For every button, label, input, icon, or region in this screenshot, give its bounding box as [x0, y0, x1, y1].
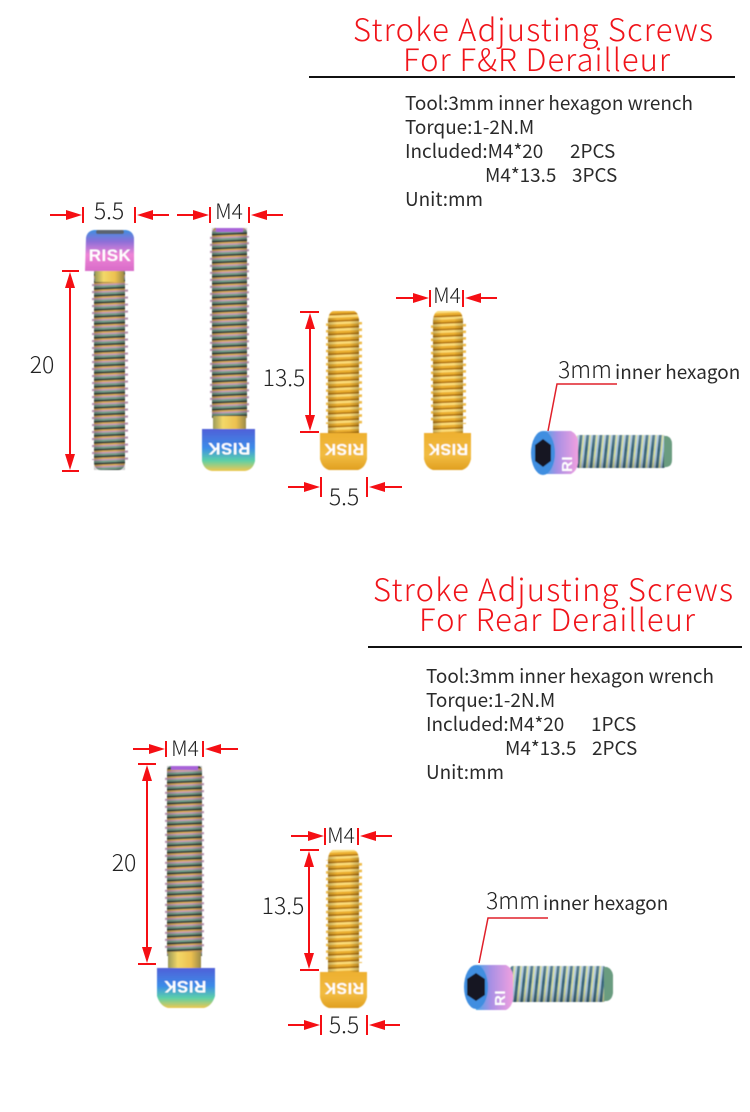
dimension: 5.5 gold head: [288, 477, 402, 512]
dimension: 20 length: 20: [30, 346, 54, 380]
callout: 3mm inner hexagon section 2: [479, 882, 668, 963]
specs text: section 2: M4*13.5: [505, 734, 576, 761]
screw: rainbow M4x20 section 2: [157, 766, 215, 1008]
specs text: section 1: 3PCS: [572, 161, 617, 188]
dimension: 13.5 length: [263, 312, 319, 432]
callout: 3mm inner hexagon section 2: inner hexagon: [543, 889, 668, 916]
title: section 2: Stroke Adjusting Screws: [373, 565, 733, 610]
callout: 3mm inner hexagon: inner hexagon: [615, 358, 740, 385]
screw: rainbow M4x20 head up: [85, 230, 134, 470]
dimension: 20 section 2: 20: [112, 844, 136, 878]
dimension: 5.5 gold head: 5.5: [329, 478, 359, 512]
dimension: M4 gold: M4: [433, 280, 461, 310]
dimension: 5.5 head width: 5.5: [94, 192, 124, 226]
screw: gold M4x13.5: RISK: [324, 440, 364, 457]
specs text: section 1: Included:M4*20: [405, 137, 543, 164]
dimension: M4 section 2: [133, 733, 238, 763]
dimension: M4 thread: [177, 196, 283, 226]
dimension: M4 gold: [396, 280, 497, 310]
dimension: 20 length: [30, 271, 79, 471]
specs text: section 1: Tool:3mm inner hexagon wrench: [405, 89, 693, 116]
dimension: 5.5 head width: [50, 192, 169, 226]
title: section 2: [368, 565, 742, 648]
screw: gold M4x13.5 second: [424, 311, 471, 470]
specs text: section 1: Unit:mm: [405, 185, 483, 212]
specs text: section 1: [405, 89, 693, 212]
specs text: section 2: [426, 662, 714, 785]
specs text: section 2: 1PCS: [591, 710, 636, 737]
specs text: section 2: Tool:3mm inner hexagon wrench: [426, 662, 714, 689]
dimension: 20 section 2: [112, 764, 156, 964]
title: section 1: For F&R Derailleur: [403, 35, 671, 80]
dimension: 13.5 length: 13.5: [263, 359, 305, 393]
specs text: section 1: M4*13.5: [485, 161, 556, 188]
screw: rainbow M4x20 head down: RISK: [207, 439, 250, 458]
screw: gold M4x13.5 section 2: RISK: [324, 979, 364, 996]
screw: rainbow horizontal section 2: RI: [492, 990, 509, 1006]
specs text: section 2: 2PCS: [592, 734, 637, 761]
screw: rainbow M4x20 head down: [202, 228, 255, 471]
dimension: 13.5 section 2: 13.5: [262, 887, 304, 921]
callout: 3mm inner hexagon: 3mm: [558, 351, 612, 385]
dimension: 5.5 section 2: 5.5: [329, 1006, 359, 1040]
dimension: M4 thread: M4: [215, 196, 243, 226]
screw: gold M4x13.5 second: RISK: [428, 440, 468, 457]
specs text: section 2: Torque:1-2N.M: [426, 686, 555, 713]
dimension: 5.5 section 2: [288, 1006, 400, 1040]
dimension: M4 gold section 2: [291, 820, 392, 850]
screw: gold M4x13.5 section 2: [320, 850, 367, 1008]
title: section 1: [309, 5, 735, 80]
specs text: section 1: 2PCS: [570, 137, 615, 164]
screw: rainbow horizontal section 2: [464, 965, 613, 1010]
screw: rainbow M4x20 section 2: RISK: [163, 977, 206, 996]
callout: 3mm inner hexagon section 2: 3mm: [486, 882, 540, 916]
callout: 3mm inner hexagon: [548, 351, 740, 431]
specs text: section 1: Torque:1-2N.M: [405, 113, 534, 140]
specs text: section 2: Unit:mm: [426, 758, 504, 785]
screw: rainbow horizontal with hex socket: RI: [559, 456, 576, 472]
screw: rainbow M4x20 head up: RISK: [89, 246, 132, 265]
dimension: 13.5 section 2: [262, 850, 319, 970]
screw: rainbow horizontal with hex socket: [531, 431, 672, 475]
specs text: section 2: Included:M4*20: [426, 710, 564, 737]
screw: gold M4x13.5: [320, 311, 367, 470]
dimension: M4 gold section 2: M4: [327, 820, 355, 850]
dimension: M4 section 2: M4: [171, 733, 199, 763]
title: section 1: Stroke Adjusting Screws: [353, 5, 713, 50]
title: section 2: For Rear Derailleur: [419, 595, 696, 640]
